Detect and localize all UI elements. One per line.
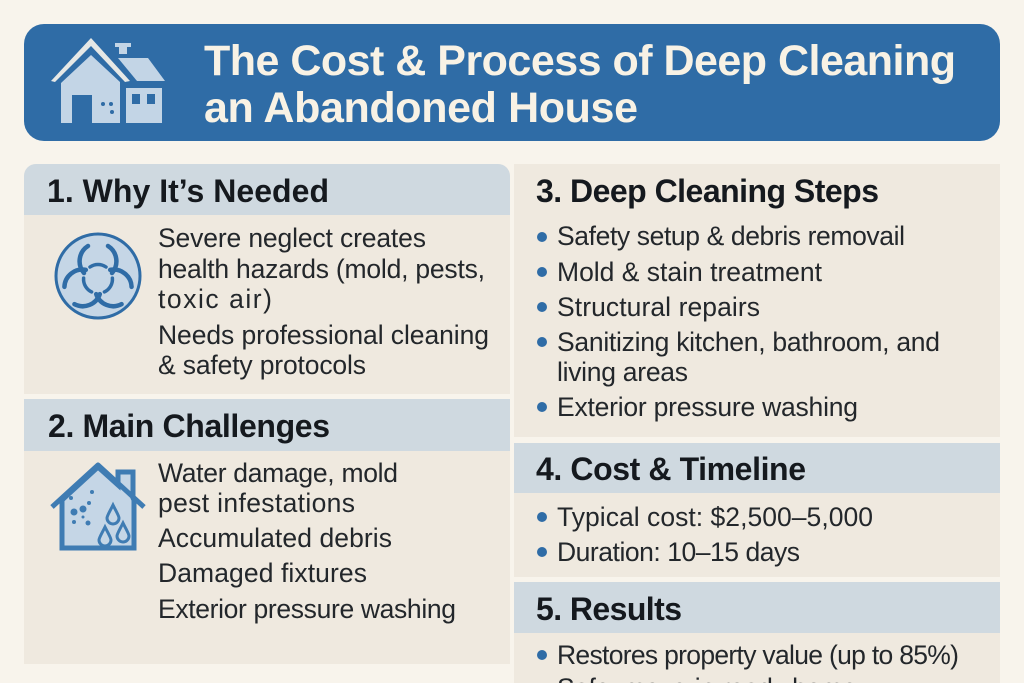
text: main challenges: Exterior pressure washing — [158, 594, 456, 624]
heading: results — [514, 582, 1000, 633]
list: cost and timeline: Duration: 10–15 days — [557, 537, 800, 567]
list: cost and timeline — [537, 502, 873, 567]
list: deep cleaning steps: Structural repairs — [557, 292, 760, 322]
panel: main challenges — [24, 399, 510, 664]
heading: why it's needed — [24, 164, 510, 215]
text: main challenges — [158, 458, 456, 624]
text: why it's needed: & safety protocols — [158, 350, 366, 380]
text: why it's needed: toxic air) — [158, 284, 272, 314]
list: results — [537, 640, 959, 683]
list: deep cleaning steps: Safety setup & debris removail — [557, 221, 905, 251]
icon: biohazard — [56, 234, 140, 318]
text: main challenges: pest infestations — [158, 488, 355, 518]
heading: results: 5. Results — [536, 591, 682, 627]
title — [204, 37, 956, 132]
title: an Abandoned House — [204, 84, 638, 132]
panel: cost and timeline — [514, 443, 1000, 577]
text: main challenges: Water damage, mold — [158, 458, 398, 488]
icon: house — [51, 38, 165, 123]
text: main challenges: Damaged fixtures — [158, 558, 367, 588]
list: results: Restores property value (up to 85%) — [557, 640, 959, 670]
text: why it's needed: Needs professional cleaning — [158, 320, 489, 350]
list: deep cleaning steps: living areas — [557, 357, 688, 387]
heading: cost and timeline: 4. Cost & Timeline — [536, 451, 806, 487]
heading: why it's needed: 1. Why It’s Needed — [47, 173, 329, 209]
panel: results — [514, 582, 1000, 683]
heading: main challenges — [24, 399, 510, 451]
icon: damaged house — [52, 465, 144, 548]
list: deep cleaning steps: Mold & stain treatment — [557, 257, 823, 287]
title: The Cost & Process of Deep Cleaning — [204, 37, 956, 85]
text: main challenges: Accumulated debris — [158, 523, 392, 553]
header banner — [24, 24, 1000, 141]
list: deep cleaning steps: Exterior pressure washing — [557, 392, 858, 422]
heading: cost and timeline — [514, 443, 1000, 493]
heading: deep cleaning steps: 3. Deep Cleaning Steps — [536, 173, 879, 209]
heading: main challenges: 2. Main Challenges — [48, 408, 330, 444]
panel: deep cleaning steps — [514, 164, 1000, 437]
list: deep cleaning steps: Sanitizing kitchen, bathroom, and — [557, 327, 940, 357]
text: why it's needed — [158, 223, 489, 380]
list: deep cleaning steps — [537, 221, 940, 422]
list: cost and timeline: Typical cost: $2,500–5,000 — [557, 502, 873, 532]
text: why it's needed: Severe neglect creates — [158, 223, 426, 253]
panel: why it's needed — [24, 164, 510, 394]
text: why it's needed: health hazards (mold, pests, — [158, 254, 485, 284]
